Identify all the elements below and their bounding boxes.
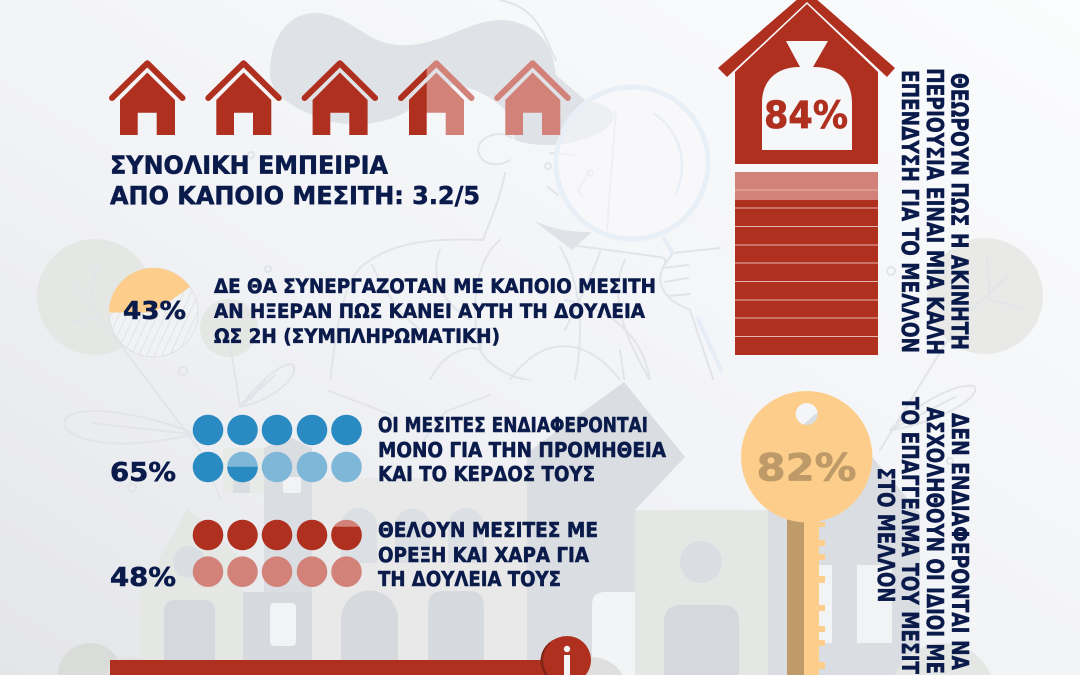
icon: magnifying glass — [556, 87, 722, 372]
text block: commission and profit: ΟΙ ΜΕΣΙΤΕΣ ΕΝΔΙΑΦΕΡΟΝΤΑΙ — [378, 413, 648, 437]
text block: commission and profit — [378, 413, 666, 486]
text block: property is a good investment — [896, 68, 972, 355]
background illustration: tinted circles — [37, 238, 1043, 675]
icon: key 82%: 82% — [756, 446, 856, 490]
text block: not interested in the profession: ΣΤΟ ΜΕΛΛΟΝ — [872, 468, 898, 602]
bar: striped 84% gauge — [735, 172, 878, 355]
background illustration: buildings — [140, 382, 920, 675]
background illustration: face details — [545, 110, 616, 230]
text block: property is a good investment: ΕΠΕΝΔΥΣΗ ΓΙΑ ΤΟ ΜΕΛΛΟΝ — [896, 70, 922, 353]
text block: would not cooperate: ΑΝ ΗΞΕΡΑΝ ΠΩΣ ΚΑΝΕΙ ΑΥΤΗ ΤΗ ΔΟΥΛΕΙΑ — [214, 300, 645, 323]
text block: property is a good investment: ΘΕΩΡΟΥΝ ΠΩΣ Η ΑΚΙΝΗΤΗ — [946, 73, 972, 350]
icon: house 2 — [208, 63, 279, 135]
stat: 48%: 48% — [110, 563, 176, 593]
dot chart: 48% red — [193, 520, 362, 587]
text block: would not cooperate: ΩΣ 2Η (ΣΥΜΠΛΗΡΩΜΑΤΙΚΗ) — [214, 325, 500, 348]
text block: would not cooperate — [214, 275, 656, 348]
heading: overall experience: ΣΥΝΟΛΙΚΗ ΕΜΠΕΙΡΙΑ — [110, 150, 389, 180]
background illustration: chin wedge — [533, 220, 592, 250]
text block: commission and profit: ΚΑΙ ΤΟ ΚΕΡΔΟΣ ΤΟΥΣ — [378, 462, 595, 486]
icon: house 5 faded — [497, 63, 568, 135]
text block: appetite and joy: ΘΕΛΟΥΝ ΜΕΣΙΤΕΣ ΜΕ — [378, 518, 598, 542]
heading: overall experience: ΑΠΟ ΚΑΠΟΙΟ ΜΕΣΙΤΗ: 3.2/5 — [110, 181, 480, 210]
icon: house 3 — [305, 63, 375, 135]
background illustration: line art person and plants — [64, 0, 1022, 500]
rating: five houses — [112, 63, 568, 135]
icon: info badge — [540, 636, 591, 675]
icon: big house with money bag 84% — [718, 0, 895, 164]
text block: commission and profit: ΜΟΝΟ ΓΙΑ ΤΗΝ ΠΡΟΜΗΘΕΙΑ — [378, 438, 666, 462]
heading: overall experience — [110, 150, 480, 210]
pie chart: 43%: 43% — [123, 296, 186, 325]
dot chart: 65% blue — [193, 415, 362, 482]
icon: key 82% — [741, 391, 872, 675]
text block: appetite and joy — [378, 518, 598, 591]
footer bar — [110, 660, 550, 675]
text block: would not cooperate: ΔΕ ΘΑ ΣΥΝΕΡΓΑΖΟΤΑΝ ΜΕ ΚΑΠΟΙΟ ΜΕΣΙΤΗ — [214, 275, 656, 298]
text block: appetite and joy: ΤΗ ΔΟΥΛΕΙΑ ΤΟΥΣ — [378, 567, 561, 591]
text block: property is a good investment: ΠΕΡΙΟΥΣΙΑ ΕΙΝΑΙ ΜΙΑ ΚΑΛΗ — [921, 68, 947, 355]
icon: house 4 partially filled — [401, 63, 472, 135]
text block: appetite and joy: ΟΡΕΞΗ ΚΑΙ ΧΑΡΑ ΓΙΑ — [378, 543, 589, 567]
background illustration: hair blob — [270, 13, 614, 145]
pie chart: 43% — [109, 268, 198, 357]
stat: 65%: 65% — [110, 458, 176, 488]
icon: house 1 — [112, 63, 182, 135]
text block: not interested in the profession — [872, 397, 972, 674]
icon: big house with money bag 84%: 84% — [764, 94, 848, 137]
